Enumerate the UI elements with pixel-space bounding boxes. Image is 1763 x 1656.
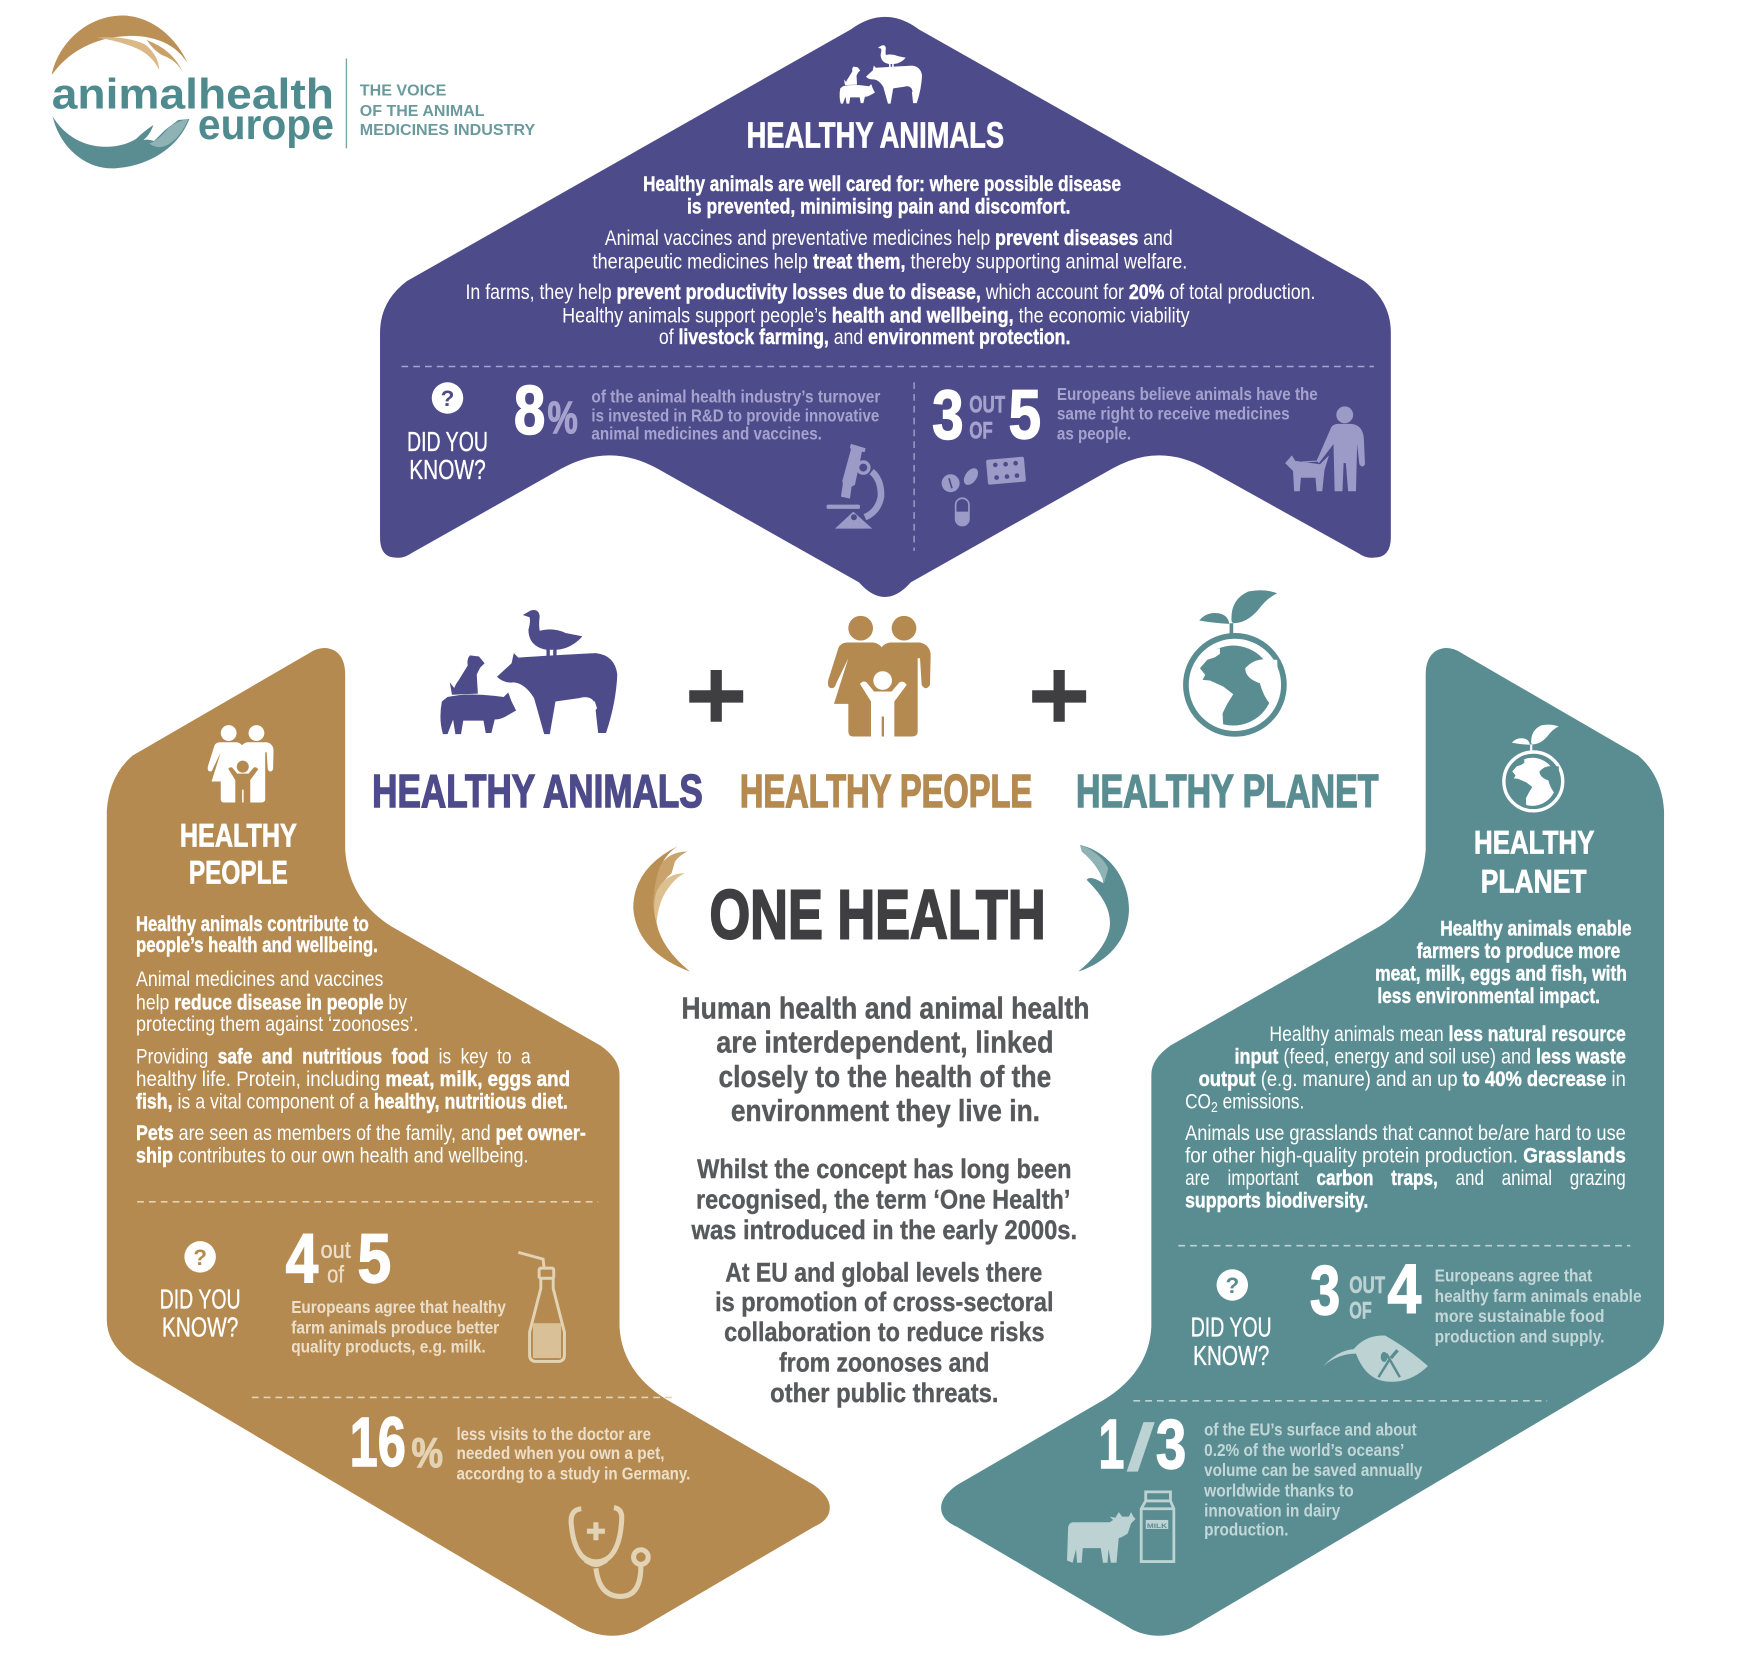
center intro text bbox=[681, 993, 1090, 1128]
stat: 3 out of 4: OF bbox=[1349, 1299, 1372, 1325]
stat: 8 percent: animal medicines and vaccines. bbox=[591, 424, 822, 444]
stat: 16 percent: 16 bbox=[350, 1403, 406, 1481]
body text: Animal medicines and vaccines bbox=[136, 968, 383, 991]
one health swooshes bbox=[633, 845, 1129, 972]
did you know bbox=[160, 1241, 241, 1343]
stat: 8 percent: of the animal health industry’s turnover bbox=[591, 386, 880, 406]
center secondary text: was introduced in the early 2000s. bbox=[691, 1215, 1077, 1245]
body text: Healthy animals are well cared for: where possible disease bbox=[643, 173, 1121, 196]
panel: healthy planet bbox=[941, 648, 1664, 1636]
stat: 16 percent: needed when you own a pet, bbox=[456, 1443, 664, 1463]
body text bbox=[1185, 917, 1631, 1212]
stat: one third: 1 bbox=[1099, 1405, 1124, 1483]
stat: one third: 3 bbox=[1156, 1405, 1186, 1483]
plus sign bbox=[1032, 670, 1086, 722]
body text: less environmental impact. bbox=[1377, 985, 1600, 1008]
stat: one third: production. bbox=[1204, 1520, 1289, 1540]
did you know: DID YOU bbox=[407, 426, 488, 457]
stat: 4 out of 5 bbox=[286, 1220, 506, 1356]
center intro text: closely to the health of the bbox=[718, 1061, 1051, 1094]
stat: 3 out of 5: 5 bbox=[1009, 375, 1041, 453]
center intro text: are interdependent, linked bbox=[716, 1026, 1054, 1059]
logo: animalhealth europe bbox=[52, 16, 536, 168]
icon: family white bbox=[208, 725, 274, 802]
stat: 3 out of 4: 3 bbox=[1310, 1251, 1340, 1329]
logo tagline: MEDICINES INDUSTRY bbox=[360, 122, 536, 139]
icon: milk carton bbox=[1141, 1492, 1174, 1562]
body text: is prevented, minimising pain and discomfort. bbox=[687, 196, 1070, 219]
icon: globe white bbox=[1504, 725, 1563, 811]
body text: therapeutic medicines help treat them, thereby supporting animal welfare. bbox=[593, 251, 1187, 274]
stat: 4 out of 5: of bbox=[327, 1263, 344, 1289]
body text: Healthy animals contribute to bbox=[136, 913, 369, 936]
body text bbox=[465, 173, 1316, 349]
stat: 3 out of 4: healthy farm animals enable bbox=[1435, 1286, 1642, 1306]
did you know: KNOW? bbox=[162, 1312, 238, 1343]
did you know: DID YOU bbox=[160, 1284, 241, 1315]
body text: output (e.g. manure) and an up to 40% decrease in bbox=[1199, 1068, 1626, 1091]
icon: leaf with cutlery bbox=[1323, 1336, 1428, 1382]
icon: cow bbox=[1067, 1512, 1136, 1563]
body text: healthy life. Protein, including meat, milk, eggs and bbox=[136, 1068, 570, 1091]
stat: 8 percent: is invested in R&D to provide innovative bbox=[591, 406, 879, 426]
stat: 4 out of 5: 5 bbox=[358, 1220, 391, 1298]
stat: one third bbox=[1099, 1405, 1422, 1540]
body text: Healthy animals support people’s health and wellbeing, the economic viability bbox=[562, 305, 1190, 328]
equation labels: HEALTHY ANIMALS bbox=[372, 765, 703, 817]
stat: 3 out of 5: OUT bbox=[969, 393, 1006, 419]
logo wordmark bbox=[52, 70, 334, 149]
body text: Healthy animals mean less natural resource bbox=[1269, 1023, 1626, 1046]
body text: help reduce disease in people by bbox=[136, 992, 408, 1015]
center secondary text: Whilst the concept has long been bbox=[697, 1154, 1072, 1184]
center secondary text: At EU and global levels there bbox=[725, 1258, 1042, 1288]
body text: 2 bbox=[1211, 1100, 1218, 1116]
equation labels bbox=[372, 765, 1378, 817]
center secondary text: collaboration to reduce risks bbox=[724, 1317, 1045, 1347]
did you know bbox=[407, 382, 488, 485]
icon: stethoscope bbox=[571, 1508, 648, 1596]
stat: 3 out of 5: OF bbox=[969, 418, 993, 444]
body text: are important carbon traps, and animal grazing bbox=[1185, 1167, 1626, 1190]
body text: Animals use grasslands that cannot be/are hard to use bbox=[1185, 1122, 1626, 1145]
body text bbox=[136, 913, 586, 1167]
equation labels: HEALTHY PLANET bbox=[1076, 765, 1378, 817]
panel: healthy people bbox=[107, 648, 830, 1636]
stat: 3 out of 5: same right to receive medicines bbox=[1057, 403, 1290, 423]
stat: 3 out of 4: more sustainable food bbox=[1435, 1306, 1604, 1326]
stat: 3 out of 4: OUT bbox=[1349, 1273, 1386, 1299]
stat: one third: innovation in dairy bbox=[1204, 1501, 1340, 1521]
stat: 16 percent bbox=[350, 1403, 690, 1483]
body text: of livestock farming, and environment protection. bbox=[659, 326, 1070, 349]
icon: globe large bbox=[1186, 590, 1284, 734]
logo tagline: OF THE ANIMAL bbox=[360, 103, 485, 120]
heading: PEOPLE bbox=[189, 854, 288, 891]
body text: Healthy animals enable bbox=[1440, 917, 1631, 940]
title: one health: ONE HEALTH bbox=[709, 876, 1046, 954]
body text: for other high-quality protein production. Grasslands bbox=[1185, 1144, 1626, 1167]
stat: 4 out of 5: Europeans agree that healthy bbox=[291, 1297, 506, 1317]
center secondary text: is promotion of cross-sectoral bbox=[715, 1287, 1054, 1317]
did you know: KNOW? bbox=[1193, 1340, 1269, 1371]
center secondary text: from zoonoses and bbox=[779, 1348, 989, 1378]
body text: meat, milk, eggs and fish, with bbox=[1375, 962, 1627, 985]
icon: animals large bbox=[440, 610, 617, 734]
heading: PLANET bbox=[1481, 863, 1587, 900]
body text: supports biodiversity. bbox=[1185, 1189, 1368, 1212]
icon: milk bottle bbox=[518, 1252, 564, 1361]
body text: Pets are seen as members of the family, and pet owner- bbox=[136, 1122, 586, 1145]
body text: people’s health and wellbeing. bbox=[136, 934, 378, 957]
did you know bbox=[1191, 1269, 1272, 1371]
heading: HEALTHY bbox=[1474, 823, 1595, 860]
stat: 3 out of 4: production and supply. bbox=[1435, 1326, 1604, 1346]
logo tagline: THE VOICE bbox=[360, 83, 446, 100]
stat: 3 out of 4: 4 bbox=[1387, 1250, 1421, 1328]
logo wordmark: animalhealth bbox=[52, 70, 334, 118]
stat: one third: 0.2% of the world’s oceans’ bbox=[1204, 1440, 1404, 1460]
stat: 16 percent: accordng to a study in Germany. bbox=[456, 1463, 690, 1483]
stat: 3 out of 4 bbox=[1310, 1250, 1642, 1346]
icon: pills bbox=[942, 457, 1026, 526]
stat: 16 percent: less visits to the doctor are bbox=[456, 1424, 651, 1444]
body text: input (feed, energy and soil use) and less waste bbox=[1235, 1046, 1626, 1069]
center secondary text: other public threats. bbox=[770, 1378, 998, 1408]
icon: milk carton: MILK bbox=[1147, 1523, 1167, 1530]
stat: 4 out of 5: out bbox=[320, 1238, 351, 1264]
heading: HEALTHY bbox=[180, 817, 297, 854]
stat: 8 percent: % bbox=[548, 392, 578, 443]
body text: fish, is a vital component of a healthy, nutritious diet. bbox=[136, 1090, 568, 1113]
center secondary text bbox=[691, 1154, 1077, 1408]
stat: 4 out of 5: 4 bbox=[286, 1220, 318, 1298]
icon: person walking dog bbox=[1285, 406, 1365, 491]
did you know: KNOW? bbox=[409, 454, 486, 485]
body text: CO bbox=[1185, 1090, 1216, 1113]
stat: 8 percent: 8 bbox=[514, 371, 545, 449]
heading bbox=[180, 817, 297, 891]
icon: family large bbox=[828, 616, 931, 737]
stat: 3 out of 5 bbox=[932, 375, 1318, 453]
body text: farmers to produce more bbox=[1417, 940, 1620, 963]
stat: 4 out of 5: farm animals produce better bbox=[291, 1317, 499, 1337]
icon: animals white bbox=[840, 45, 922, 104]
stat: 3 out of 5: 3 bbox=[932, 375, 964, 453]
stat: 3 out of 4: Europeans agree that bbox=[1435, 1266, 1592, 1286]
stat: 3 out of 5: Europeans believe animals have the bbox=[1057, 384, 1318, 404]
heading: HEALTHY ANIMALS bbox=[747, 114, 1004, 155]
body text: protecting them against ‘zoonoses’. bbox=[136, 1013, 418, 1036]
center secondary text: recognised, the term ‘One Health’ bbox=[696, 1185, 1070, 1215]
logo wordmark: europe bbox=[198, 101, 334, 149]
equation labels: HEALTHY PEOPLE bbox=[740, 765, 1032, 817]
stat: one third: worldwide thanks to bbox=[1203, 1480, 1354, 1500]
logo tagline bbox=[360, 83, 536, 139]
icon: microscope bbox=[827, 444, 881, 529]
heading bbox=[1474, 823, 1595, 900]
stat: one third: of the EU’s surface and about bbox=[1204, 1420, 1417, 1440]
plus sign bbox=[689, 670, 743, 722]
body text: emissions. bbox=[1218, 1090, 1304, 1113]
panel: healthy animals bbox=[380, 17, 1391, 597]
center intro text: environment they live in. bbox=[731, 1095, 1040, 1128]
did you know: DID YOU bbox=[1191, 1312, 1272, 1343]
body text: Providing safe and nutritious food is key to a bbox=[136, 1046, 531, 1069]
logo swoosh bbox=[52, 16, 189, 168]
body text: Animal vaccines and preventative medicines help prevent diseases and bbox=[605, 227, 1173, 250]
stat: 3 out of 5: as people. bbox=[1057, 424, 1131, 444]
center intro text: Human health and animal health bbox=[681, 993, 1090, 1026]
stat: 8 percent bbox=[514, 371, 880, 449]
stat: 4 out of 5: quality products, e.g. milk. bbox=[291, 1336, 486, 1356]
body text: ship contributes to our own health and wellbeing. bbox=[136, 1144, 528, 1167]
body text: In farms, they help prevent productivity losses due to disease, which account for 20% of total production. bbox=[465, 281, 1316, 304]
stat: one third: volume can be saved annually bbox=[1204, 1460, 1422, 1480]
stat: 16 percent: % bbox=[412, 1429, 443, 1476]
